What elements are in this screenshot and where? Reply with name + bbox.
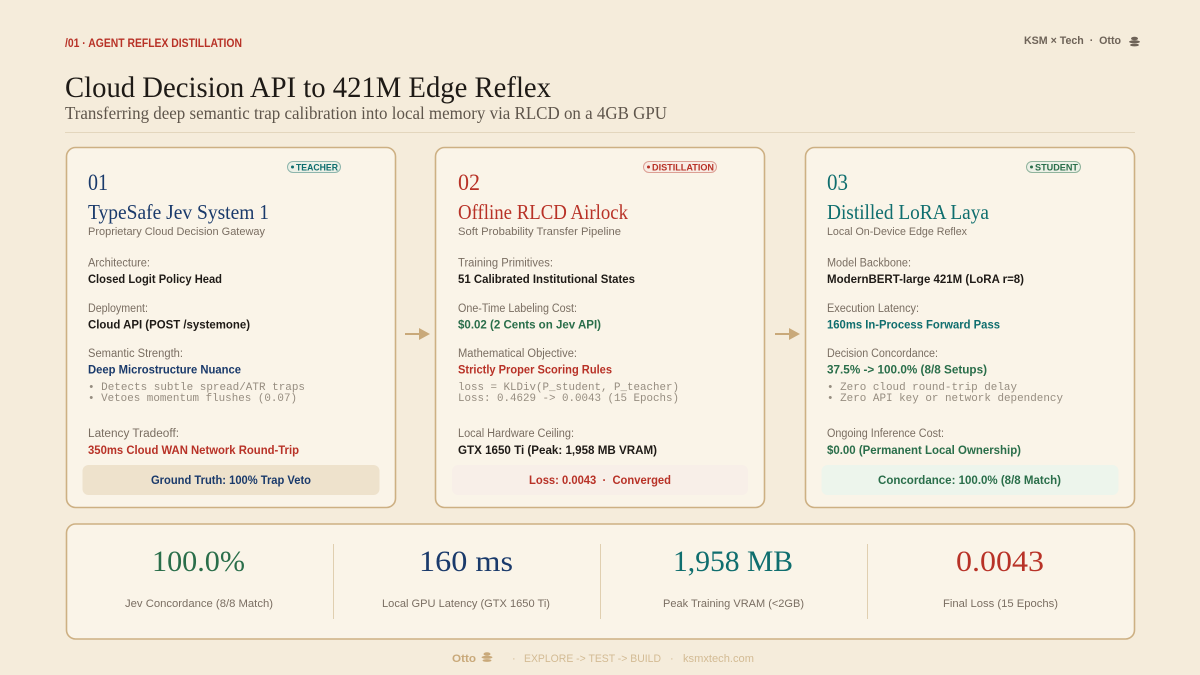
badge: teacher: TEACHER — [296, 162, 338, 174]
badge: distillation: DISTILLATION — [652, 162, 714, 174]
deployment field — [88, 303, 250, 332]
icon: otto mascot footer — [482, 652, 492, 662]
stat: loss — [943, 545, 1058, 610]
semantic strength field — [88, 348, 305, 405]
inference cost field: $0.00 (Permanent Local Ownership) — [827, 443, 1021, 457]
execution latency field — [827, 303, 1000, 332]
mathematical objective field: loss = KLDiv(P_student, P_teacher) — [458, 382, 679, 394]
training primitives field — [458, 258, 635, 286]
training primitives field: 51 Calibrated Institutional States — [458, 272, 635, 286]
semantic strength field: • Detects subtle spread/ATR traps — [88, 382, 305, 394]
labeling cost field: $0.02 (2 Cents on Jev API) — [458, 318, 601, 332]
stat: concordance: 100.0% — [152, 545, 245, 578]
brand header: KSM × Tech · Otto — [1024, 35, 1121, 47]
inference cost field — [827, 428, 1021, 457]
arrow: distillation to student — [775, 328, 800, 340]
mathematical objective field — [458, 348, 679, 405]
inference cost field: Ongoing Inference Cost: — [827, 428, 944, 440]
architecture field: Closed Logit Policy Head — [88, 272, 222, 286]
labeling cost field — [458, 303, 601, 332]
panel: distillation — [436, 148, 764, 508]
stat: latency — [382, 545, 550, 610]
footer: EXPLORE -> TEST -> BUILD — [524, 653, 661, 665]
deployment field: Cloud API (POST /systemone) — [88, 318, 250, 332]
stat: vram — [663, 545, 804, 610]
callout: ground truth: Ground Truth: 100% Trap Veto — [151, 473, 311, 487]
mathematical objective field: Strictly Proper Scoring Rules — [458, 362, 612, 376]
latency field: 350ms Cloud WAN Network Round-Trip — [88, 443, 299, 457]
footer: ksmxtech.com — [683, 653, 754, 665]
decision concordance field — [827, 348, 1063, 405]
decision concordance field: 37.5% -> 100.0% (8/8 Setups) — [827, 362, 987, 376]
card subheading: Proprietary Cloud Decision Gateway — [88, 226, 265, 238]
callout: loss — [452, 465, 748, 495]
step number: 02 — [458, 170, 480, 195]
card subheading: Local On-Device Edge Reflex — [827, 226, 967, 238]
mathematical objective field: Loss: 0.4629 -> 0.0043 (15 Epochs) — [458, 393, 679, 405]
execution latency field: Execution Latency: — [827, 303, 919, 315]
footer — [452, 652, 754, 665]
footer: · — [512, 653, 516, 665]
hardware field — [458, 428, 657, 457]
model backbone field: ModernBERT-large 421M (LoRA r=8) — [827, 272, 1024, 286]
footer: Otto — [452, 653, 476, 665]
stat: loss: 0.0043 — [956, 545, 1044, 578]
footer: · — [670, 653, 674, 665]
arrow: teacher to distillation — [405, 328, 430, 340]
card heading: TypeSafe Jev System 1 — [88, 200, 269, 224]
mathematical objective field: Mathematical Objective: — [458, 348, 577, 360]
semantic strength field: Semantic Strength: — [88, 348, 183, 360]
training primitives field: Training Primitives: — [458, 258, 553, 270]
stat: concordance — [125, 545, 273, 610]
decision concordance field: • Zero cloud round-trip delay — [827, 382, 1017, 394]
card heading: Distilled LoRA Laya — [827, 200, 990, 224]
panel: stats — [66, 524, 1134, 639]
model backbone field: Model Backbone: — [827, 258, 911, 270]
step number: 03 — [827, 170, 848, 195]
latency field: Latency Tradeoff: — [88, 428, 179, 440]
semantic strength field: Deep Microstructure Nuance — [88, 362, 241, 376]
execution latency field: 160ms In-Process Forward Pass — [827, 318, 1000, 332]
card subheading: Soft Probability Transfer Pipeline — [458, 226, 621, 238]
eyebrow: /01 · AGENT REFLEX DISTILLATION — [65, 38, 242, 50]
hardware field: GTX 1650 Ti (Peak: 1,958 MB VRAM) — [458, 443, 657, 457]
stat: concordance: Jev Concordance (8/8 Match) — [125, 598, 273, 610]
stat: latency: Local GPU Latency (GTX 1650 Ti) — [382, 598, 550, 610]
title: Cloud Decision API to 421M Edge Reflex — [65, 71, 551, 104]
semantic strength field: • Vetoes momentum flushes (0.07) — [88, 393, 297, 405]
architecture field — [88, 258, 222, 286]
panel: teacher — [66, 148, 396, 508]
callout: loss: Loss: 0.0043 · Converged — [529, 473, 671, 487]
deployment field: Deployment: — [88, 303, 148, 315]
callout: concordance — [822, 465, 1118, 495]
stat: loss: Final Loss (15 Epochs) — [943, 598, 1058, 610]
callout: concordance: Concordance: 100.0% (8/8 Match) — [878, 473, 1061, 487]
card heading: Offline RLCD Airlock — [458, 200, 628, 224]
stat: vram: Peak Training VRAM (<2GB) — [663, 598, 804, 610]
badge: student: STUDENT — [1035, 162, 1078, 174]
labeling cost field: One-Time Labeling Cost: — [458, 303, 577, 315]
decision concordance field: • Zero API key or network dependency — [827, 393, 1063, 405]
callout: ground truth — [82, 465, 380, 495]
panel: student — [806, 148, 1134, 508]
architecture field: Architecture: — [88, 258, 150, 270]
icon: otto mascot — [1129, 37, 1140, 46]
stat: vram: 1,958 MB — [673, 545, 793, 578]
model backbone field — [827, 258, 1024, 286]
hardware field: Local Hardware Ceiling: — [458, 428, 574, 440]
decision concordance field: Decision Concordance: — [827, 348, 938, 360]
latency field — [88, 428, 299, 457]
subtitle: Transferring deep semantic trap calibration into local memory via RLCD on a 4GB GPU — [65, 103, 667, 123]
stat: latency: 160 ms — [419, 545, 513, 578]
step number: 01 — [88, 170, 108, 195]
